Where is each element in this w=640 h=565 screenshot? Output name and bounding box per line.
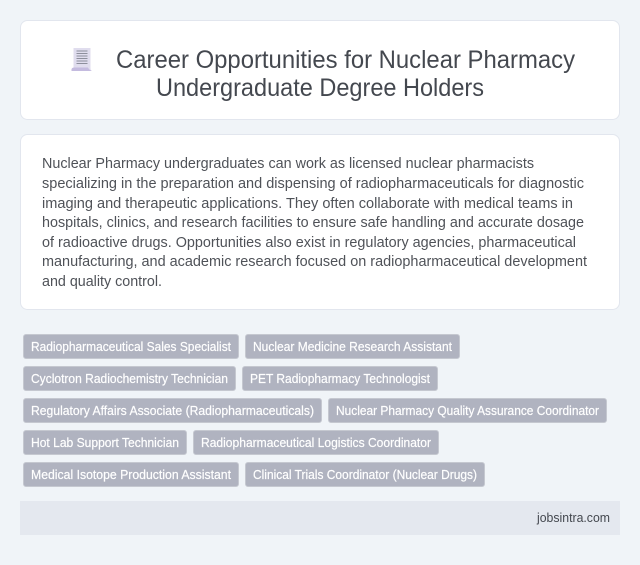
tag (242, 366, 438, 390)
tag: Nuclear Pharmacy Quality Assurance Coordinator (336, 404, 599, 418)
text block: description: imaging and therapeutic applications. They often collaborate with medical teams in (42, 195, 573, 212)
tag: Medical Isotope Production Assistant (31, 468, 231, 482)
tag (194, 430, 438, 454)
tag: Cyclotron Radiochemistry Technician (31, 372, 228, 386)
tag: Nuclear Medicine Research Assistant (253, 340, 452, 354)
footer (20, 501, 620, 535)
tag (246, 462, 484, 486)
panel: description (20, 134, 620, 310)
tag (24, 462, 238, 486)
text block: description: Nuclear Pharmacy undergraduates can work as licensed nuclear pharmacists (42, 155, 534, 172)
tag (246, 334, 460, 358)
tag: Radiopharmaceutical Sales Specialist (31, 340, 231, 354)
tag: Regulatory Affairs Associate (Radiopharmaceuticals) (31, 404, 314, 418)
text block: description: of radioactive drugs. Opportunities also exist in regulatory agencies, pharmaceutical (42, 234, 576, 251)
tag (24, 366, 236, 390)
footer source text: jobsintra.com (536, 511, 610, 525)
text block: description: manufacturing, and academic research focused on radiopharmaceutical development (42, 253, 588, 270)
tags: career roles (24, 334, 606, 486)
heading line 2: Undergraduate Degree Holders (156, 75, 484, 102)
icon: document (71, 48, 92, 71)
tag (24, 334, 238, 358)
text block: description: and quality control. (42, 273, 162, 290)
text block: description: hospitals, clinics, and research facilities to ensure safe handling and accurate dosage (42, 214, 584, 231)
tag (328, 398, 606, 422)
panel: title (20, 20, 620, 120)
tag: Clinical Trials Coordinator (Nuclear Drugs) (253, 468, 477, 482)
tag: PET Radiopharmacy Technologist (250, 372, 430, 386)
tag (24, 430, 186, 454)
text block: description: specializing in the preparation and dispensing of radiopharmaceuticals for diagnostic (42, 175, 584, 192)
heading: Career Opportunities for Nuclear Pharmacy (116, 47, 576, 74)
tag (24, 398, 322, 422)
tag: Hot Lab Support Technician (31, 436, 179, 450)
tag: Radiopharmaceutical Logistics Coordinator (201, 436, 431, 450)
text block: description (42, 155, 588, 290)
